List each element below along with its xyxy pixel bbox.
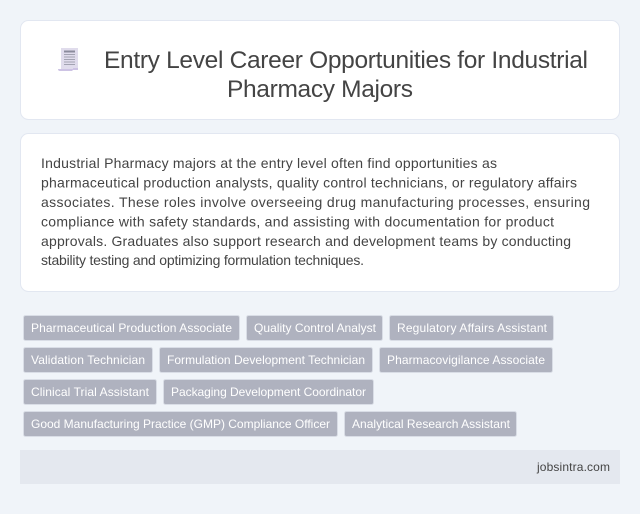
tag: Regulatory Affairs Assistant [397,321,548,335]
tag [160,348,372,372]
footer bar [20,450,620,484]
title: Entry Level Career Opportunities for Industrial [104,47,588,74]
tag [390,316,554,340]
footer source: jobsintra.com [536,460,610,474]
tag [246,316,382,340]
text block: description: stability testing and optimizing formulation techniques. [41,252,364,268]
tag: Validation Technician [31,353,145,367]
tag: Packaging Development Coordinator [171,385,366,399]
title: Pharmacy Majors [227,76,413,103]
tag: Pharmacovigilance Associate [387,353,545,367]
tag [24,380,156,404]
tag: Analytical Research Assistant [352,417,511,431]
text block: description: associates. These roles involve overseeing drug manufacturing processes, ensuring [41,194,590,210]
panel: description [20,134,620,292]
tag: Good Manufacturing Practice (GMP) Compliance Officer [31,417,330,431]
tag [24,412,338,436]
tag: Pharmaceutical Production Associate [31,321,232,335]
title [104,47,588,103]
tag: Quality Control Analyst [254,321,377,335]
text block: description: pharmaceutical production analysts, quality control technicians, or regulatory affairs [41,174,577,190]
tag [380,348,552,372]
tag [164,380,374,404]
text block: description: approvals. Graduates also support research and development teams by conducting [41,233,571,249]
text block: description [41,155,590,268]
text block: description: Industrial Pharmacy majors at the entry level often find opportunities as [41,155,497,171]
tag: Formulation Development Technician [167,353,365,367]
tag [24,348,152,372]
icon: document scroll [58,48,78,71]
tags: job titles [24,316,554,436]
tag: Clinical Trial Assistant [31,385,150,399]
panel: header [20,20,620,120]
tag [24,316,240,340]
tag [344,412,516,436]
text block: description: compliance with safety standards, and assisting with documentation for product [41,214,554,230]
